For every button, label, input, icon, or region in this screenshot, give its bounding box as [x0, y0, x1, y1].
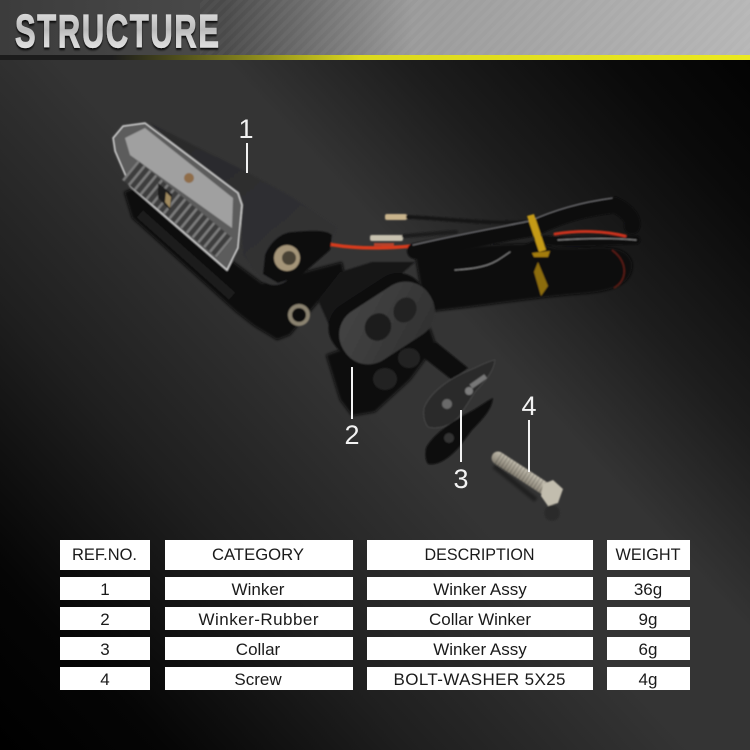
clear lens	[113, 123, 242, 270]
row 3: Winker Assy	[433, 640, 527, 659]
row 1: Winker	[232, 580, 285, 599]
title: STRUCTURE	[15, 7, 221, 58]
row 3: 6g	[639, 640, 657, 659]
table header row: REF.NO.	[72, 545, 137, 564]
callout 2: 2	[344, 420, 360, 450]
row 2: 9g	[639, 610, 657, 629]
row 4: BOLT-WASHER 5X25	[394, 670, 566, 689]
red wire	[300, 236, 412, 248]
reflection: rubber	[326, 328, 436, 416]
header band	[0, 0, 750, 60]
wire loom	[404, 198, 636, 270]
row 2: Winker-Rubber	[198, 610, 319, 629]
callout 4: 4	[521, 391, 537, 421]
callout 1	[238, 114, 254, 173]
reflection: collar	[425, 398, 493, 464]
reflection: wire loom	[415, 244, 632, 312]
gold cable tie	[527, 214, 550, 257]
reflection: winker housing	[124, 188, 344, 340]
row 4: 4g	[639, 670, 657, 689]
row 2: 2	[100, 610, 110, 629]
bushing nut	[274, 245, 300, 271]
row 1: Winker Assy	[433, 580, 527, 599]
row 1: 1	[100, 580, 110, 599]
mount stem behind rubber	[318, 262, 415, 350]
collar plate	[424, 360, 495, 428]
row 4: 4	[100, 670, 110, 689]
collar shaft	[424, 342, 468, 380]
terminal connectors	[370, 214, 407, 246]
product photo: exploded winker	[113, 123, 636, 521]
callout 3	[453, 410, 469, 494]
spec table	[60, 540, 690, 690]
table header row: WEIGHT	[616, 545, 680, 564]
table header row: DESCRIPTION	[424, 545, 534, 564]
rubber gasket	[318, 263, 446, 375]
callout 3: 3	[453, 464, 469, 494]
row 2	[60, 607, 690, 630]
row 3: Collar	[236, 640, 281, 659]
callout 2	[344, 367, 360, 450]
row 4: Screw	[234, 670, 282, 689]
row 2: Collar Winker	[429, 610, 531, 629]
callout 4	[521, 391, 537, 472]
bolt	[494, 458, 563, 521]
callout 1: 1	[238, 114, 254, 144]
row 1: 36g	[634, 580, 662, 599]
table header row: CATEGORY	[212, 545, 304, 564]
winker body	[150, 123, 337, 285]
row 3	[60, 637, 690, 660]
row 4	[60, 667, 690, 690]
row 3: 3	[100, 640, 110, 659]
table header row	[60, 540, 690, 570]
row 1	[60, 577, 690, 600]
